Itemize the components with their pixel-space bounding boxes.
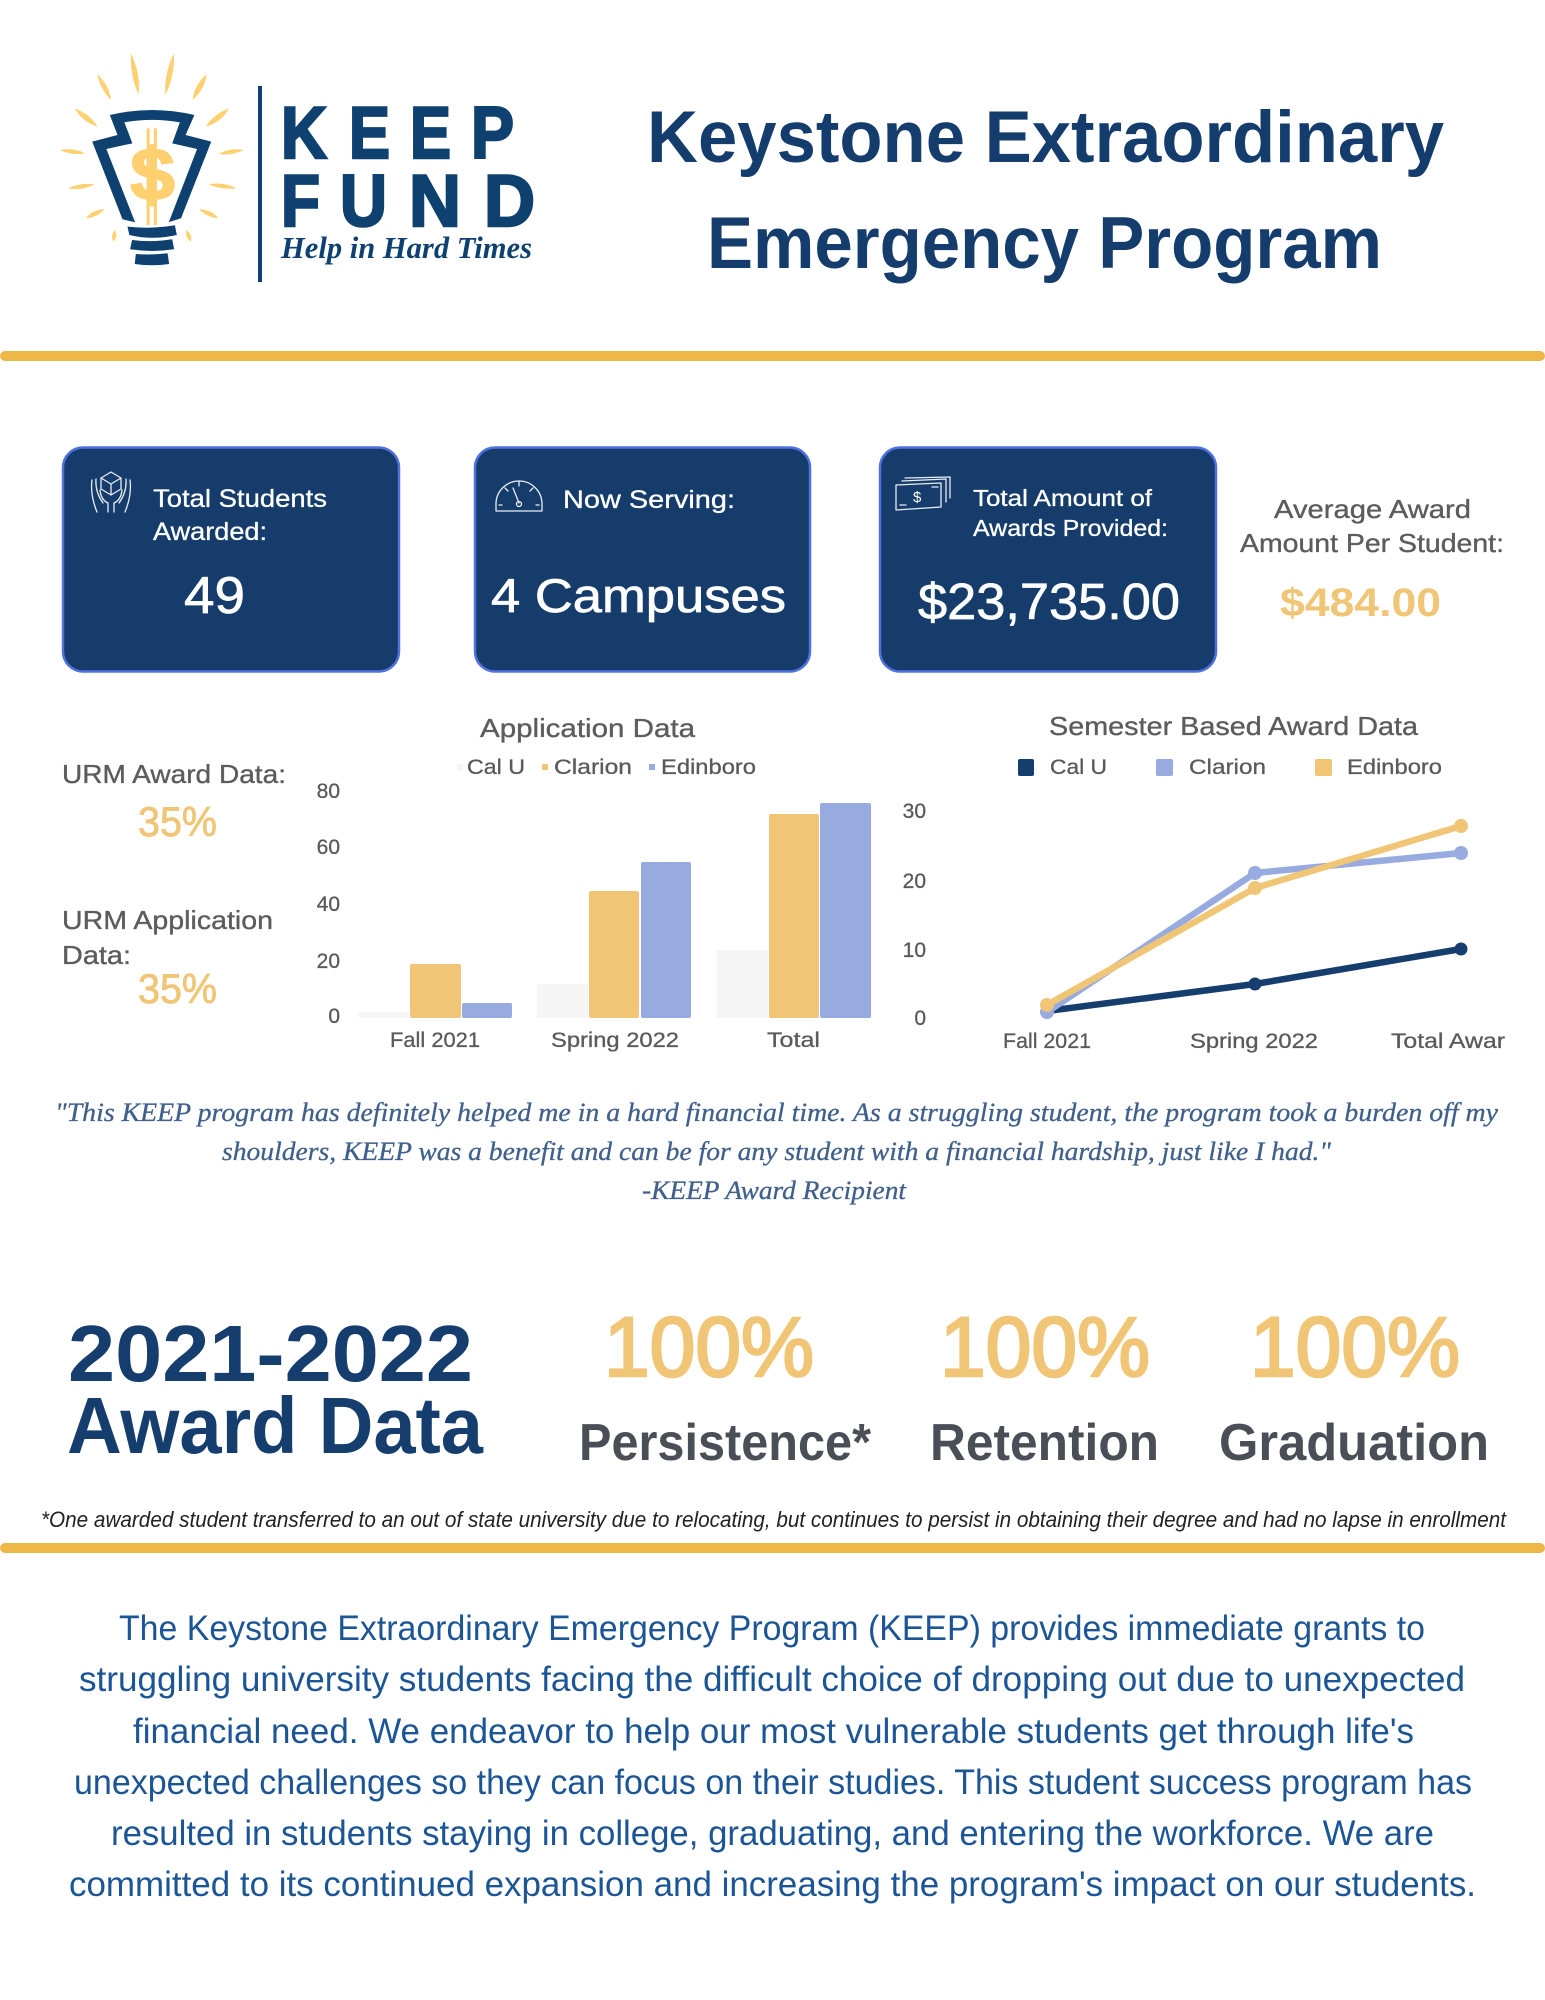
stat: persistence: Persistence*: [579, 1414, 872, 1472]
stat: persistence: 100%: [604, 1300, 814, 1394]
URM award data: 35%: [138, 798, 217, 845]
description paragraph: struggling university students facing the difficult choice of dropping out due to unexpected: [79, 1660, 1465, 1699]
quote: [55, 1098, 1498, 1205]
legend: [1018, 756, 1442, 779]
x axis: Total: [767, 1029, 820, 1052]
bars: [359, 803, 871, 1018]
y axis: 0: [914, 1007, 926, 1030]
URM application data: Data:: [62, 940, 131, 970]
wordmark: KEEP: P: [471, 93, 514, 174]
description paragraph: unexpected challenges so they can focus on their studies. This student success program has: [74, 1763, 1472, 1802]
description paragraph: committed to its continued expansion and increasing the program's impact on our students.: [69, 1865, 1476, 1904]
legend: [457, 756, 756, 779]
label: [973, 485, 1168, 541]
x axis: Spring 2022: [551, 1029, 679, 1052]
legend: Edinboro: [1347, 756, 1442, 779]
title: [647, 97, 1444, 284]
x axis: Fall 2021: [390, 1029, 480, 1052]
value: 4 Campuses: [491, 569, 786, 622]
quote: shoulders, KEEP was a benefit and can be for any student with a financial hardship, just like I had.": [222, 1137, 1331, 1166]
y axis: 80: [317, 780, 340, 803]
wordmark: KEEP: [281, 93, 514, 174]
heading: 2021-2022 award data: [67, 1309, 483, 1470]
title: Emergency Program: [707, 203, 1382, 284]
icon: light bulb with dollar sign: [60, 53, 244, 265]
bar chart: application data: [317, 713, 871, 1052]
stat: retention: Retention: [930, 1414, 1159, 1472]
label: Awards Provided:: [973, 515, 1168, 541]
legend: Clarion: [1189, 756, 1266, 779]
line chart: semester based award data: [903, 711, 1505, 1053]
label: [153, 485, 327, 546]
x axis: Fall 2021: [1003, 1030, 1091, 1053]
panel: now serving: [475, 448, 810, 672]
logo: KEEP Fund: [60, 53, 535, 282]
x axis: [1003, 1030, 1505, 1053]
average award amount: Average Award: [1274, 494, 1471, 524]
y axis: 20: [903, 870, 926, 893]
line: Clarion: [1040, 846, 1468, 1019]
quote: -KEEP Award Recipient: [642, 1176, 907, 1205]
average award amount: [1240, 494, 1504, 625]
legend: Cal U: [467, 756, 525, 779]
logo tagline: Help in Hard Times: [280, 230, 532, 265]
panel: total amount of awards: $: [913, 489, 922, 506]
panel: total students awarded: [63, 448, 399, 672]
description paragraph: The Keystone Extraordinary Emergency Program (KEEP) provides immediate grants to: [119, 1609, 1425, 1648]
icon: banknotes: [896, 477, 950, 510]
URM award data: URM Award Data:: [62, 759, 286, 789]
stat: retention: 100%: [940, 1300, 1150, 1394]
description paragraph: [69, 1609, 1476, 1904]
x axis: Spring 2022: [1190, 1030, 1318, 1053]
quote: "This KEEP program has definitely helped me in a hard financial time. As a struggling student, the program took a burden off my: [55, 1098, 1498, 1127]
icon: hands holding box: [92, 472, 130, 512]
y axis: [317, 780, 340, 1028]
icon: light bulb with dollar sign: $: [130, 133, 175, 216]
label: Now Serving:: [563, 486, 735, 514]
x axis: [390, 1029, 820, 1052]
line chart: semester based award data: Semester Based Award Data: [1049, 711, 1419, 741]
stat: graduation: [1219, 1300, 1489, 1472]
heading: 2021-2022 award data: Award Data: [67, 1381, 483, 1470]
panel: total amount of awards: [880, 448, 1216, 672]
stat: retention: [930, 1300, 1159, 1472]
URM application data: [62, 905, 273, 1012]
legend: Edinboro: [661, 756, 756, 779]
wordmark: FUND: D: [484, 161, 535, 242]
URM award data: [62, 759, 286, 845]
y axis: [903, 800, 926, 1030]
x axis: Total Awar: [1391, 1030, 1505, 1053]
URM application data: 35%: [138, 965, 217, 1012]
heading: 2021-2022 award data: 2021-2022: [68, 1309, 473, 1398]
y axis: 20: [317, 950, 340, 973]
legend: Clarion: [554, 756, 632, 779]
wordmark: KEEP: K: [281, 93, 327, 174]
value: $23,735.00: [918, 573, 1180, 630]
label: Awarded:: [153, 518, 267, 546]
y axis: 60: [317, 836, 340, 859]
stat: graduation: Graduation: [1219, 1414, 1489, 1472]
average award amount: Amount Per Student:: [1240, 528, 1504, 558]
URM application data: URM Application: [62, 905, 273, 935]
label: Total Students: [153, 485, 327, 513]
wordmark: FUND: F: [281, 161, 320, 242]
y axis: 40: [317, 893, 340, 916]
legend: Cal U: [1050, 756, 1107, 779]
icon: gauge: [496, 481, 542, 511]
wordmark: FUND: U: [340, 161, 387, 242]
y axis: 30: [903, 800, 926, 823]
line: Cal U: [1047, 942, 1468, 1011]
wordmark: KEEP: E: [410, 93, 451, 174]
label: Total Amount of: [973, 485, 1153, 511]
y axis: 10: [903, 939, 926, 962]
description paragraph: resulted in students staying in college, graduating, and entering the workforce. We are: [111, 1814, 1434, 1853]
description paragraph: financial need. We endeavor to help our most vulnerable students get through life's: [133, 1712, 1414, 1751]
bar chart: application data: Application Data: [480, 713, 696, 743]
value: $484.00: [1280, 581, 1441, 625]
y axis: 0: [328, 1005, 340, 1028]
stat: graduation: 100%: [1250, 1300, 1460, 1394]
wordmark: KEEP: E: [349, 93, 390, 174]
stat: persistence: [579, 1300, 872, 1472]
title: Keystone Extraordinary: [647, 97, 1444, 178]
wordmark: FUND: N: [409, 161, 461, 242]
line: Edinboro: [1040, 819, 1468, 1012]
value: 49: [184, 567, 245, 625]
wordmark: FUND: [281, 161, 535, 242]
